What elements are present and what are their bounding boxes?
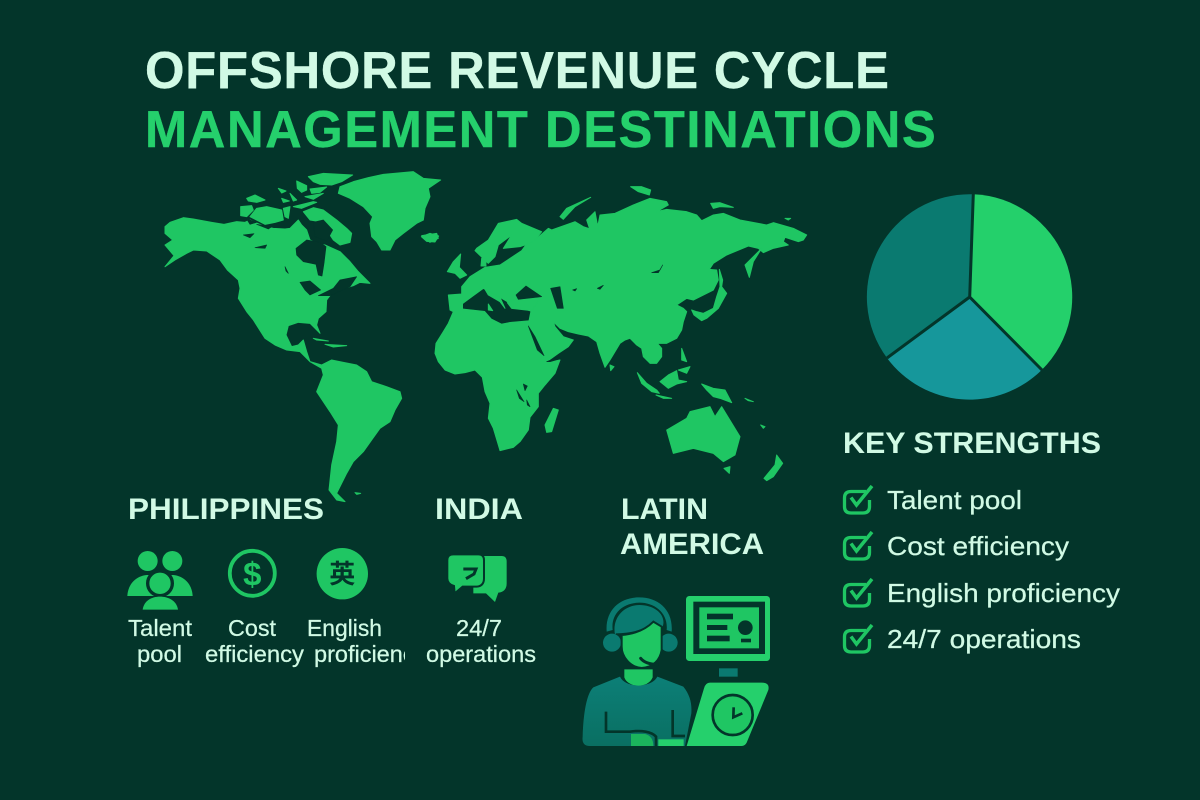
panel: Philippines [127,493,427,667]
heading: India: INDIA [435,493,523,526]
list item: cost efficiency: Cost efficiency [887,531,1069,561]
label: English proficiency: proficiency [314,641,427,667]
slice: green [970,194,1072,370]
label: talent pool: Talent [128,615,192,641]
label: cost efficiency [205,615,304,667]
icon: English language glyph [317,548,368,599]
pie chart [867,194,1072,400]
list item: English proficiency: English proficiency [887,578,1120,608]
agent neck [624,669,653,686]
label: 24/7 operations: operations [426,641,536,667]
heading: Philippines: PHILIPPINES [128,493,324,526]
icon: dollar coin: $ [243,556,261,592]
slice: light teal [887,297,1042,400]
label: talent pool: pool [137,641,182,667]
label: cost efficiency: efficiency [205,641,304,667]
agent hand [631,734,653,746]
label: cost efficiency: Cost [228,615,276,641]
world map [165,172,807,502]
map: Europe, Asia, Africa and Oceania [421,187,807,481]
title: MANAGEMENT DESTINATIONS [145,100,936,158]
title: OFFSHORE REVENUE CYCLE [145,41,889,99]
keyboard [658,739,684,746]
agent face [622,622,662,668]
agent arm lines [606,710,685,746]
label: 24/7 operations [426,615,536,667]
monitor stand [719,668,738,677]
panel: India [426,493,536,667]
headset microphone [641,658,657,665]
icon: English language glyph: 英 [329,559,355,589]
heading: Latin America: AMERICA [620,528,764,561]
panel: Latin America [583,493,770,746]
infographic canvas [127,51,1120,746]
heading: key strengths: KEY STRENGTHS [843,427,1101,460]
icon: chat bubbles [447,554,507,602]
label: 24/7 operations: 24/7 [456,615,502,641]
icon: dollar coin [230,551,275,596]
monitor content [707,614,753,642]
agent body [583,677,691,746]
slice: dark teal [867,194,973,358]
label: English proficiency [308,618,405,668]
list item: talent pool: Talent pool [887,485,1022,515]
icon: support agent at monitor and laptop [583,596,770,746]
monitor [686,596,770,661]
label: talent pool [128,615,192,667]
label: English proficiency: English [307,615,382,641]
laptop [687,683,769,746]
headset [603,597,678,652]
heading: Latin America [620,493,764,561]
laptop clock [713,695,753,735]
title [145,41,936,158]
list item: 24/7 operations: 24/7 operations [887,624,1081,654]
panel: key strengths [843,427,1120,654]
heading: Latin America: LATIN [621,493,708,526]
icon: talent pool people [127,551,193,610]
map: the Americas [165,172,441,502]
